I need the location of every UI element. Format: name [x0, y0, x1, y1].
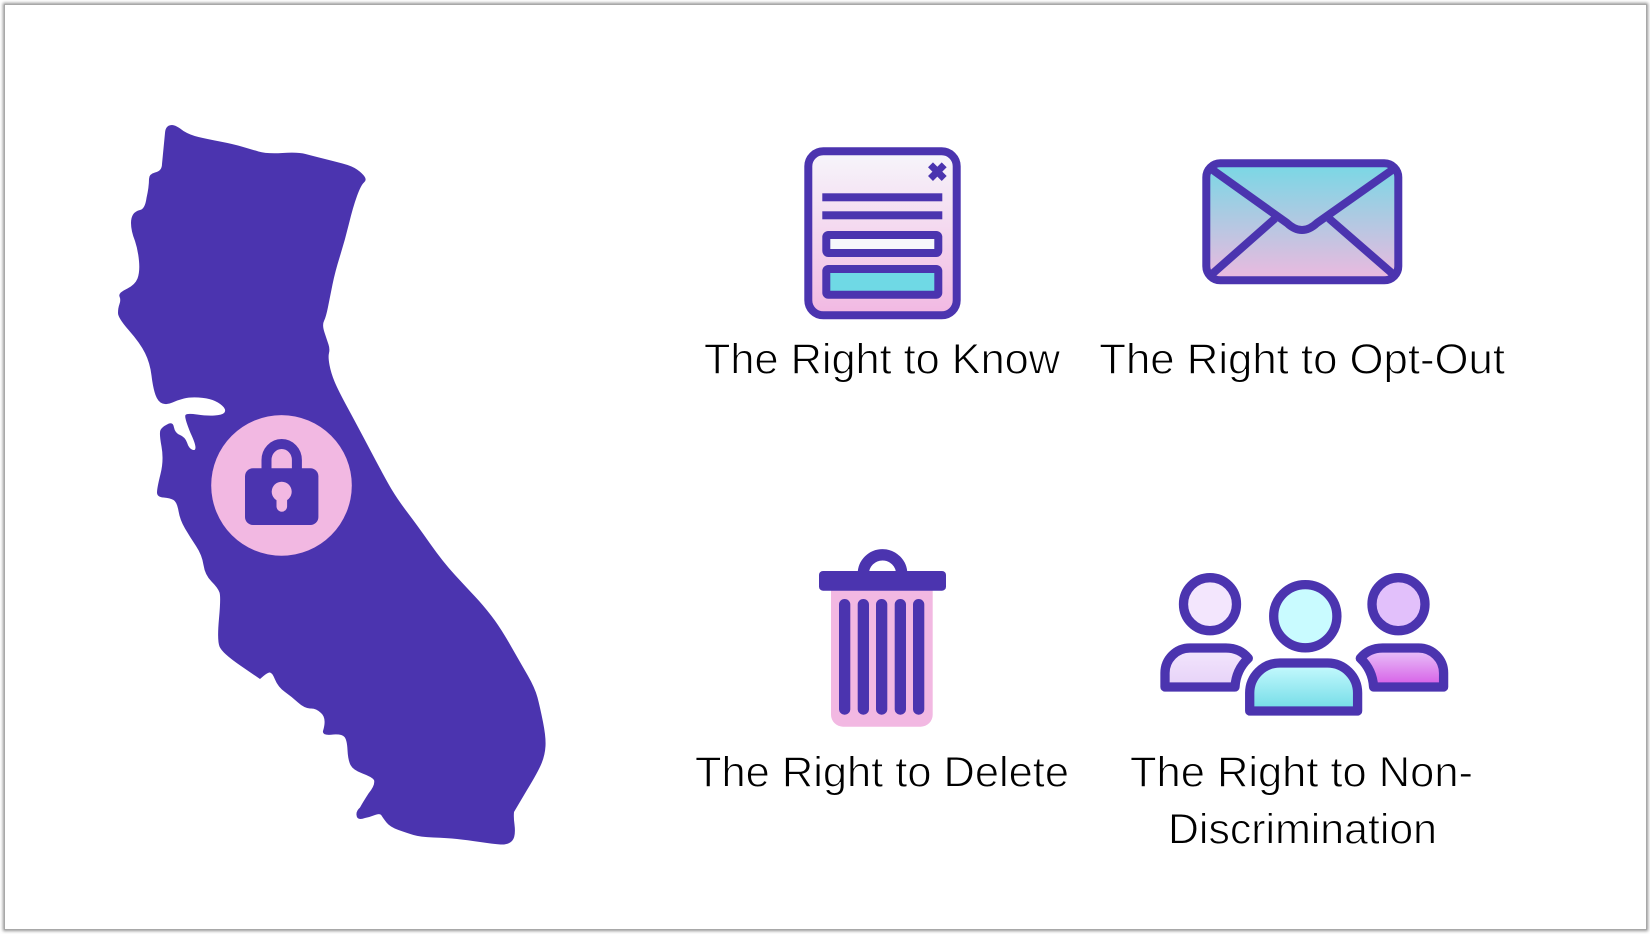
- label: The Right to Delete: [695, 748, 1069, 796]
- label: The Right to Know: [704, 335, 1061, 383]
- right: The Right to Opt-Out: [1099, 163, 1505, 383]
- label: [1130, 748, 1473, 853]
- padlock badge circle: [211, 415, 352, 556]
- icon: three people: [1165, 578, 1444, 711]
- icon: envelope: [1206, 163, 1398, 280]
- label: The Right to Opt-Out: [1099, 335, 1505, 383]
- icon: form document: [808, 151, 957, 315]
- right: The Right to Know: [704, 151, 1061, 383]
- icon: trash can: [819, 555, 946, 727]
- label: Discrimination: [1168, 805, 1437, 853]
- right: The Right to Delete: [695, 555, 1069, 796]
- label: The Right to Non-: [1130, 748, 1473, 796]
- California silhouette: [118, 125, 546, 845]
- icon: padlock: [245, 444, 318, 525]
- right: The Right to Non-Discrimination: [1130, 578, 1473, 853]
- map of California with padlock: [118, 125, 546, 845]
